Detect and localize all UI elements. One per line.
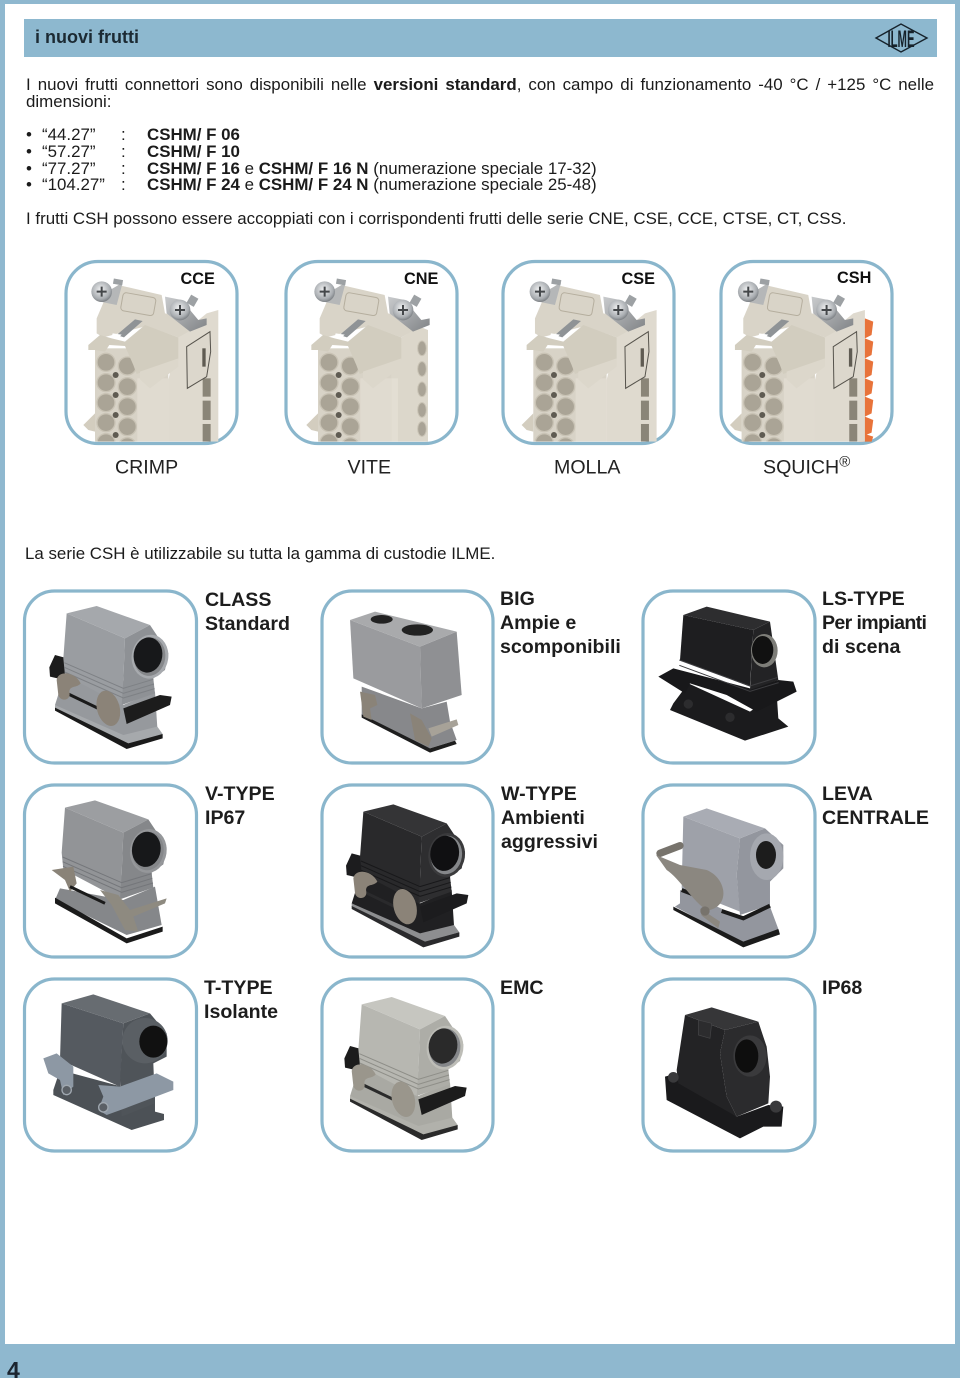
panel: CCE crimp insert [66, 262, 237, 478]
label: CRIMP: CRIMP [115, 456, 178, 478]
panel: T-TYPE [24, 977, 278, 1151]
panel: BIG [322, 588, 621, 763]
photo: CSH connector insert [730, 279, 873, 456]
label: MOLLA: MOLLA [554, 456, 621, 478]
panel: CLASS Standard [24, 589, 290, 763]
panel: V-TYPE [24, 783, 275, 957]
heading: T-TYPE Isolante: T-TYPE [204, 977, 273, 999]
dimension list: : [121, 142, 126, 161]
heading: BIG: scomponibili [500, 636, 621, 658]
header bar [24, 19, 937, 57]
label: CCE: CCE [180, 270, 215, 288]
photo: LEVA housing [656, 808, 783, 947]
dimension list: CSHM/ F 10 [147, 142, 240, 161]
heading: LS-TYPE: Per impianti [822, 612, 927, 634]
dimension list: : [121, 175, 126, 194]
icon: ILME logo [876, 24, 927, 53]
heading: EMC: EMC [500, 977, 544, 999]
dimension list: “104.27” [42, 175, 105, 194]
compatibility sentence: I frutti CSH possono essere accoppiati con i corrispondenti frutti delle serie CNE, CSE, CCE, CTSE, CT, CSS. [26, 209, 846, 228]
heading: IP68: IP68 [822, 977, 862, 999]
heading: CLASS Standard: CLASS [205, 589, 271, 611]
heading: CLASS Standard: Standard [205, 613, 290, 635]
dimension list: “57.27” [42, 142, 96, 161]
panel: CSE spring insert [503, 262, 674, 478]
dimension list: : [121, 159, 126, 178]
photo: CNE connector insert [306, 279, 430, 456]
photo: CLASS housing [49, 606, 172, 749]
label: VITE: VITE [348, 456, 391, 478]
label: CSH: CSH [837, 269, 871, 287]
heading: V-TYPE IP67: V-TYPE [205, 783, 275, 805]
label: SQUICH registered: ® [839, 454, 850, 470]
heading: W-TYPE: Ambienti [501, 807, 585, 829]
photo: BIG housing [350, 612, 462, 753]
dimension list: “44.27” [42, 125, 96, 144]
label: CNE: CNE [404, 270, 439, 288]
panel: CSH squich insert [721, 262, 892, 478]
dimension list: • [26, 175, 32, 194]
section title: i nuovi frutti [35, 27, 139, 47]
label: SQUICH registered: SQUICH [763, 456, 839, 478]
range sentence: La serie CSH è utilizzabile su tutta la gamma di custodie ILME. [25, 544, 495, 563]
panel: W-TYPE [322, 783, 598, 957]
intro paragraph: I nuovi frutti connettori sono disponibili nelle versioni standard, con campo di funzionamento -40 °C / +125 °C nelle dimensioni: [26, 75, 934, 111]
heading: V-TYPE IP67: IP67 [205, 807, 245, 829]
dimension list: • [26, 142, 32, 161]
dimension list: “77.27” [42, 159, 96, 178]
photo: CCE connector insert [83, 279, 218, 456]
label: CSE: CSE [622, 270, 655, 288]
bottom page band [0, 1344, 960, 1378]
panel: LEVA CENTRALE [643, 783, 929, 957]
heading: LEVA CENTRALE: CENTRALE [822, 807, 929, 829]
photo: LS-TYPE housing [658, 607, 797, 741]
panel: CNE screw insert [286, 262, 457, 478]
photo: W-TYPE housing [346, 804, 468, 947]
dimension list: • [26, 159, 32, 178]
heading: LEVA CENTRALE: LEVA [822, 783, 873, 805]
panel: IP68 [643, 977, 862, 1151]
icon: ILME logo: ILME [888, 26, 914, 53]
photo: CSE connector insert [522, 279, 657, 456]
heading: T-TYPE Isolante: Isolante [204, 1001, 278, 1023]
heading: LS-TYPE: LS-TYPE [822, 588, 905, 610]
heading: W-TYPE: W-TYPE [501, 783, 577, 805]
heading: W-TYPE: aggressivi [501, 831, 598, 853]
photo: V-TYPE housing [52, 800, 170, 943]
dimension list: CSHM/ F 24 e CSHM/ F 24 N (numerazione speciale 25-48) [147, 175, 597, 194]
dimension list: • [26, 125, 32, 144]
dimension list: : [121, 125, 126, 144]
panel: LS-TYPE [643, 588, 927, 763]
heading: LS-TYPE: di scena [822, 636, 902, 658]
photo: IP68 housing [665, 1007, 783, 1138]
dimension list: CSHM/ F 16 e CSHM/ F 16 N (numerazione speciale 17-32) [147, 159, 597, 178]
photo: EMC housing [344, 997, 467, 1140]
photo: T-TYPE housing [43, 994, 173, 1130]
dimension list [26, 125, 597, 194]
panel: EMC [322, 977, 544, 1151]
dimension list: CSHM/ F 06 [147, 125, 240, 144]
heading: BIG: Ampie e [500, 612, 576, 634]
heading: BIG: BIG [500, 588, 535, 610]
